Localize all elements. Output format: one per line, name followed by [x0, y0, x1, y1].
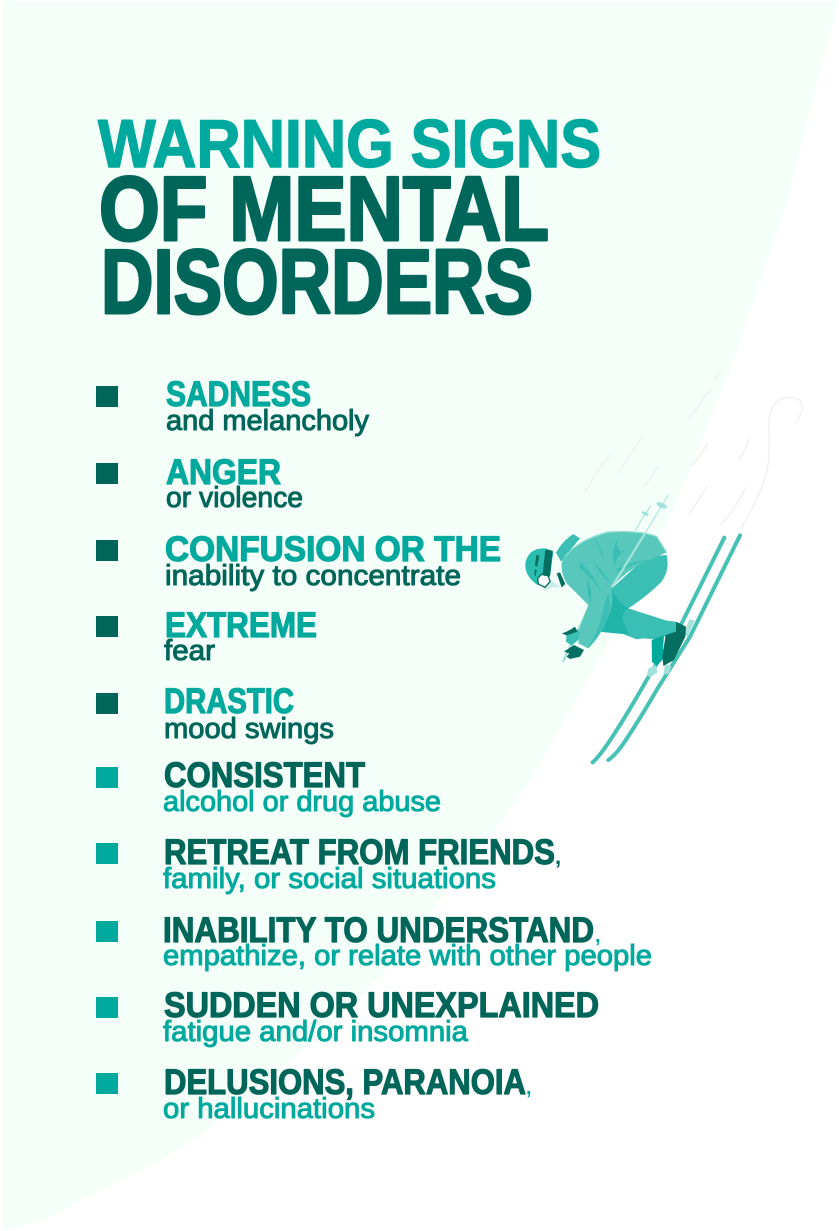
description: or hallucinations	[163, 1093, 375, 1125]
description: alcohol or drug abuse	[163, 786, 441, 818]
list item: inability	[96, 911, 652, 972]
comma: ,	[595, 925, 601, 947]
rear boot	[652, 635, 664, 666]
face	[542, 578, 564, 591]
bullet	[96, 693, 118, 714]
heading: SUDDEN OR UNEXPLAINED	[164, 986, 599, 1025]
heading: CONSISTENT	[164, 756, 365, 795]
bullet	[96, 540, 118, 561]
bullet	[96, 997, 118, 1018]
helmet vents	[534, 555, 539, 576]
jacket	[562, 532, 667, 648]
helmet	[525, 548, 553, 585]
jacket folds	[579, 537, 650, 648]
snow speed lines	[585, 370, 802, 528]
list item: sadness	[96, 375, 369, 437]
heading: DRASTIC	[164, 682, 294, 721]
hood	[556, 534, 580, 562]
ski bindings	[647, 619, 695, 677]
heading: INABILITY TO UNDERSTAND	[163, 911, 594, 950]
bullet	[96, 616, 118, 637]
bullet	[96, 921, 118, 942]
list item: sudden	[96, 986, 599, 1048]
goggles	[538, 574, 550, 587]
description: fatigue and/or insomnia	[163, 1016, 469, 1048]
heading: RETREAT FROM FRIENDS	[164, 833, 555, 872]
heading: CONFUSION OR THE	[165, 530, 501, 569]
goggle strap	[543, 550, 553, 576]
description: empathize, or relate with other people	[163, 940, 652, 972]
comma: ,	[555, 844, 561, 869]
jacket highlight	[565, 532, 667, 557]
bullet	[96, 843, 118, 864]
pants shadow	[598, 587, 630, 635]
heading: DELUSIONS, PARANOIA	[164, 1063, 526, 1102]
bullet	[96, 1073, 118, 1094]
list item: anger	[96, 453, 303, 514]
bullet	[96, 767, 118, 788]
near and far gloves	[562, 627, 584, 659]
far hand	[566, 629, 580, 646]
title line 3: DISORDERS	[101, 232, 533, 333]
description: and melancholy	[166, 405, 369, 437]
description: family, or social situations	[163, 863, 496, 895]
title line 1: WARNING SIGNS	[98, 106, 601, 182]
list item: confusion	[96, 530, 501, 592]
list item: retreat	[96, 833, 561, 895]
ski poles	[563, 495, 668, 661]
bullet	[96, 463, 118, 484]
title line 2: OF MENTAL	[99, 159, 549, 260]
description: inability to concentrate	[165, 560, 461, 592]
description: mood swings	[164, 713, 334, 745]
description: or violence	[166, 482, 303, 514]
list item: drastic	[96, 682, 334, 745]
neck band	[557, 572, 565, 587]
skis	[593, 535, 740, 762]
front boot	[662, 622, 686, 666]
heading: SADNESS	[166, 375, 311, 414]
comma: ,	[526, 1077, 532, 1099]
title	[98, 106, 601, 333]
heading: ANGER	[166, 453, 281, 492]
chest pole strap	[612, 533, 645, 587]
pants	[600, 555, 685, 639]
illustration: skier	[525, 370, 802, 762]
heading: EXTREME	[165, 606, 317, 645]
list item: delusions	[96, 1063, 532, 1125]
bullet	[96, 386, 118, 407]
list item: consistent	[96, 756, 441, 818]
description: fear	[164, 635, 215, 667]
list item: extreme	[96, 606, 317, 667]
